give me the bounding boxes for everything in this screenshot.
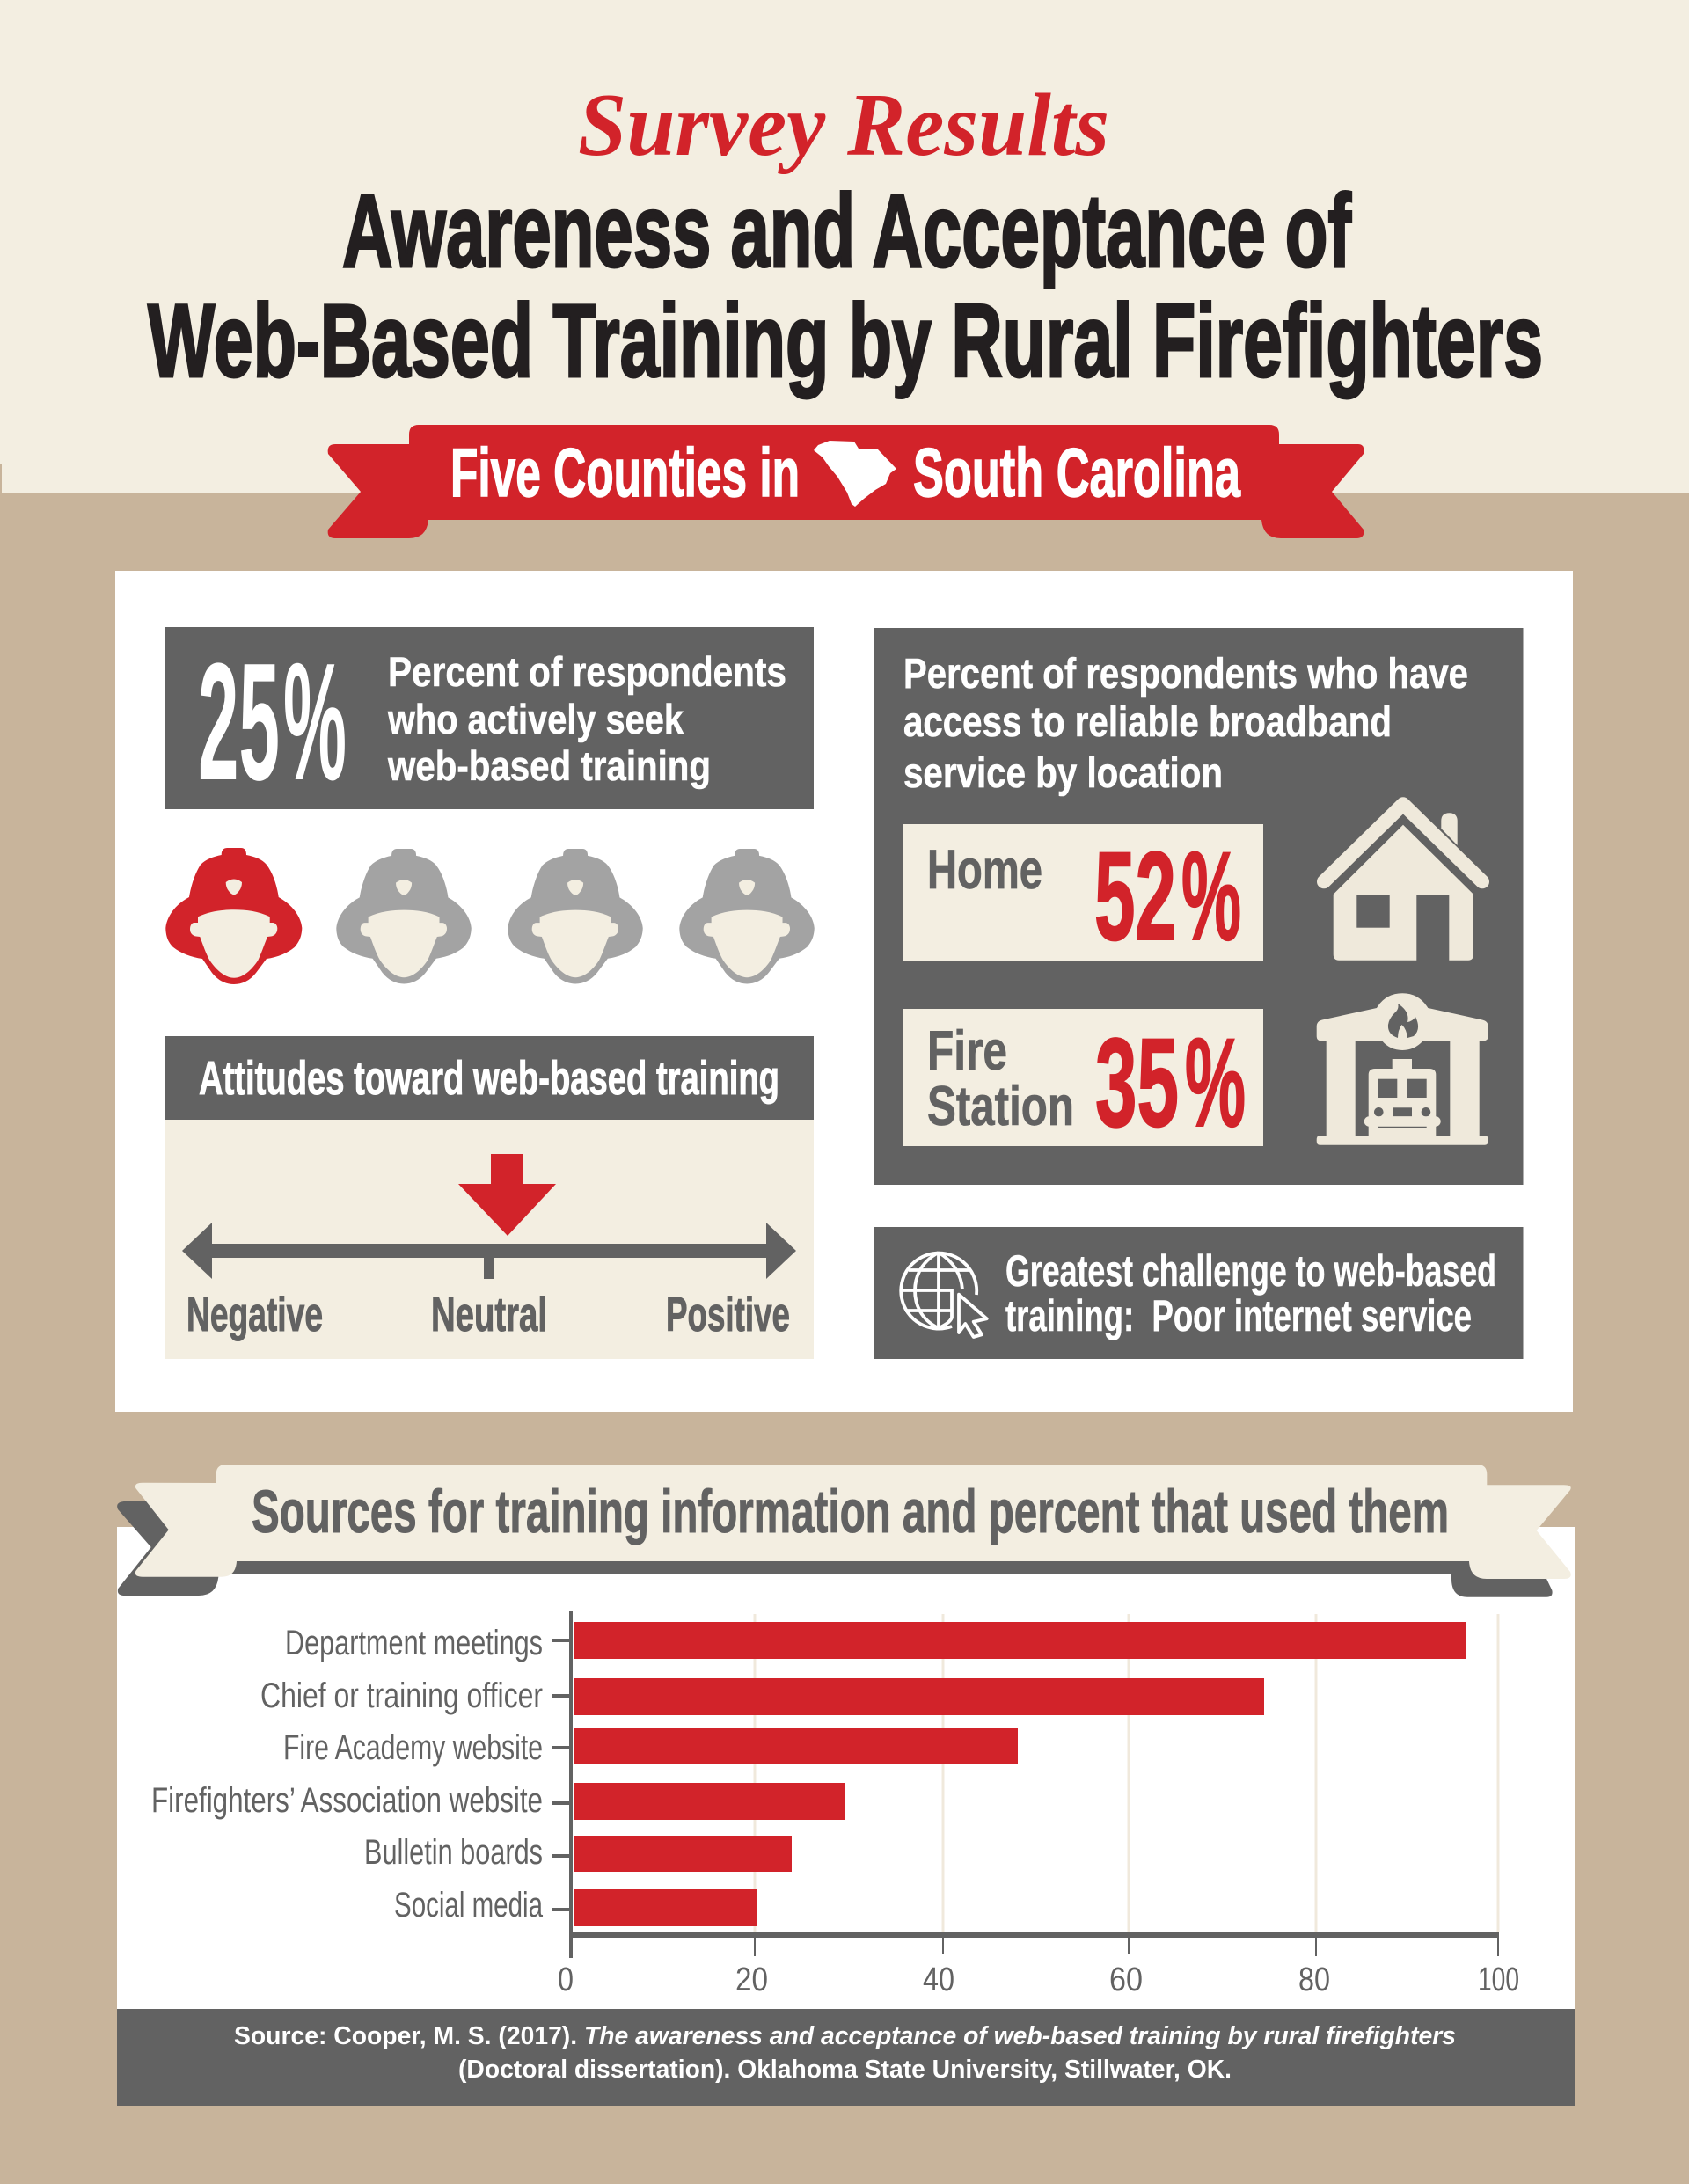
icon: gray helmet 3	[508, 849, 643, 983]
axis values: 60	[1109, 1961, 1143, 1998]
shadow ribbon	[117, 1501, 1553, 1597]
axis values: 0	[558, 1961, 574, 1998]
axes	[552, 1611, 1499, 1958]
scale labels: Negative	[186, 1287, 323, 1341]
axis values	[558, 1961, 1519, 1998]
stat: home 52 percent	[903, 824, 1263, 967]
category labels: Fire Academy website	[283, 1728, 543, 1767]
source citation: Source: Cooper, M. S. (2017). The awareness and acceptance of web-based training by rural firefighters	[234, 2022, 1456, 2050]
stat: home 52 percent: %	[1181, 827, 1241, 967]
icon: fire station	[1317, 993, 1488, 1145]
text: broadband heading: Percent of respondents who have	[903, 651, 1468, 698]
stat: fire station 35 percent	[903, 1009, 1263, 1153]
icon: red helmet	[165, 848, 302, 984]
icon: South Carolina state outline	[814, 441, 896, 507]
callout: 25 percent seek web-based training	[165, 627, 814, 815]
text: challenge: Greatest challenge to web-based	[1005, 1246, 1496, 1296]
banner: Five Counties in South Carolina: South Carolina	[913, 434, 1240, 511]
panel: sources bar chart	[117, 1465, 1575, 2106]
bar chart: sources	[151, 1611, 1519, 1998]
stat: home 52 percent: Home	[927, 839, 1042, 901]
axis values: 100	[1478, 1961, 1519, 1998]
callout: 25 percent seek web-based training: who actively seek	[387, 696, 684, 742]
category labels: Chief or training officer	[260, 1676, 543, 1715]
title block	[148, 76, 1543, 399]
category labels: Bulletin boards	[364, 1833, 543, 1872]
heading: attitudes: Attitudes toward web-based training	[199, 1052, 779, 1105]
banner: sources heading	[117, 1465, 1571, 1597]
icon: gray helmet 2	[336, 849, 472, 983]
icon: gray helmet 4	[679, 849, 815, 983]
text: broadband heading	[903, 651, 1468, 797]
callout: 25 percent seek web-based training: %	[283, 629, 347, 815]
scale labels: Neutral	[431, 1287, 547, 1341]
text: broadband heading: service by location	[903, 750, 1223, 797]
banner: Five Counties in South Carolina: Five Counties in	[450, 434, 800, 511]
axis values: 40	[923, 1961, 954, 1998]
stat: home 52 percent: 52	[1094, 827, 1176, 967]
arrow: marker pointing to neutral	[458, 1154, 556, 1236]
main title	[148, 173, 1543, 399]
text: challenge	[1005, 1246, 1496, 1340]
callout: greatest challenge	[874, 1227, 1524, 1359]
scale labels: Positive	[666, 1287, 790, 1341]
category labels: Department meetings	[285, 1624, 543, 1662]
icon: globe with cursor	[901, 1253, 987, 1337]
icon: house	[1324, 804, 1482, 961]
scale labels	[186, 1287, 790, 1341]
axis values: 80	[1298, 1961, 1330, 1998]
stat: fire station 35 percent: %	[1185, 1013, 1246, 1153]
heading: Survey Results: Survey Results	[578, 76, 1109, 175]
callout: 25 percent seek web-based training: Percent of respondents	[388, 648, 786, 695]
stat: fire station 35 percent: 35	[1095, 1013, 1179, 1153]
panel: survey findings	[115, 571, 1573, 1412]
text: challenge: training: Poor internet service	[1005, 1291, 1472, 1340]
bars	[574, 1622, 1466, 1926]
banner: Five Counties in South Carolina	[328, 425, 1364, 538]
category labels: Firefighters’ Association website	[151, 1781, 543, 1820]
source citation	[117, 2009, 1575, 2106]
stat: fire station 35 percent: Station	[927, 1076, 1074, 1137]
callout: 25 percent seek web-based training: web-based training	[387, 742, 711, 789]
category labels	[151, 1624, 544, 1925]
arrow: two-way attitude scale	[182, 1223, 796, 1279]
callout: 25 percent seek web-based training: 25	[198, 629, 280, 815]
icon: fire truck	[1364, 1059, 1441, 1136]
panel: attitudes scale	[165, 1036, 814, 1359]
axis values: 20	[735, 1961, 768, 1998]
stat: fire station 35 percent: Fire	[927, 1020, 1007, 1082]
source citation: (Doctoral dissertation). Oklahoma State University, Stillwater, OK.	[458, 2056, 1232, 2084]
icon: four firefighter helmets, one in four highlighted	[165, 848, 815, 984]
category labels: Social media	[394, 1886, 544, 1925]
panel: broadband access	[874, 628, 1524, 1185]
text: broadband heading: access to reliable broadband	[903, 699, 1392, 746]
